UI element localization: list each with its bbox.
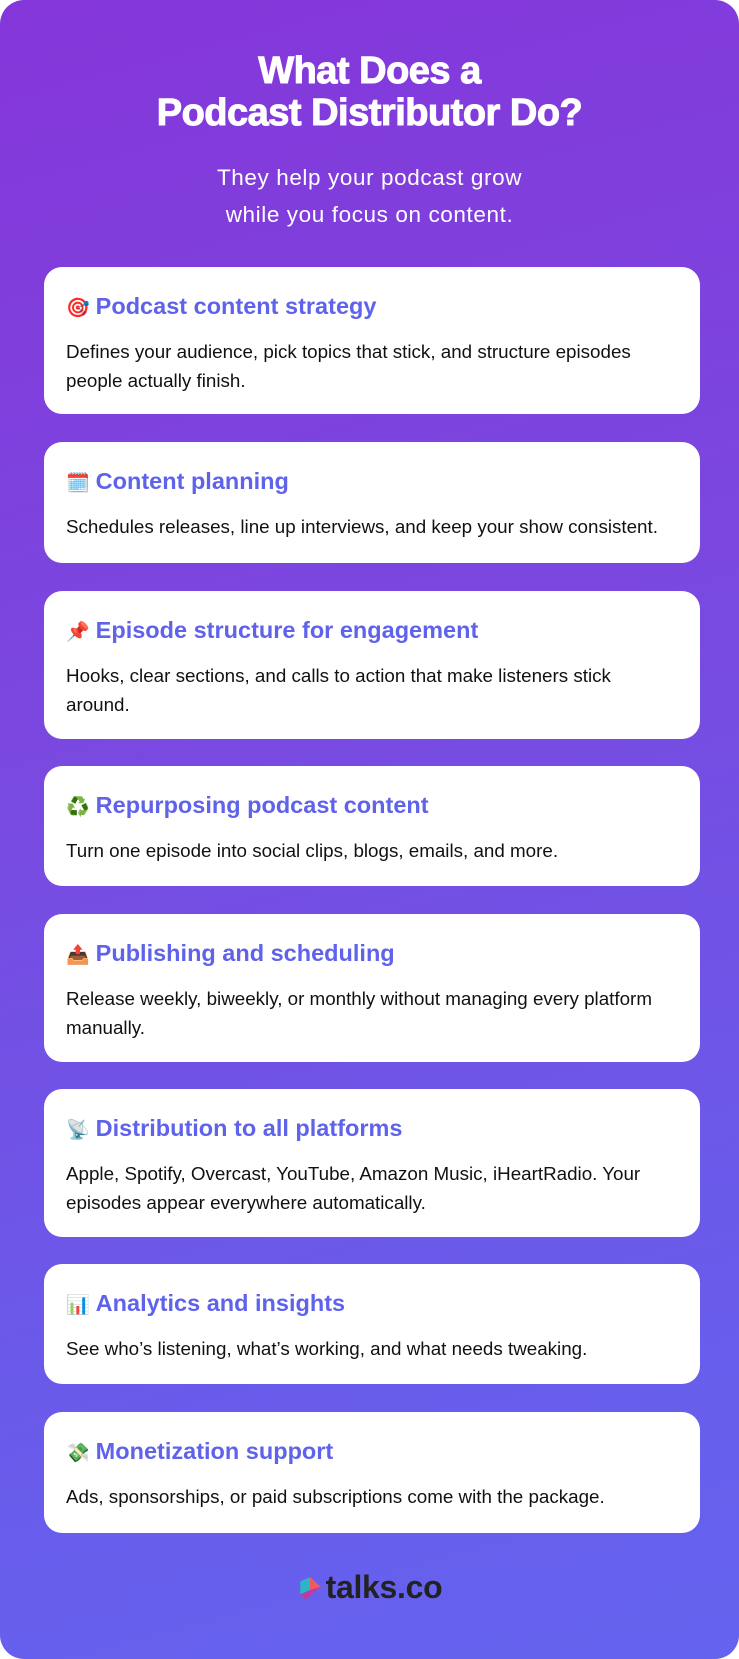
card: content planning: 🗓️ Content planning [66,468,289,494]
card: episode structure [44,591,700,739]
card: content planning: Schedules releases, line up interviews, and keep your show consistent. [66,516,658,537]
card: repurposing: Turn one episode into social clips, blogs, emails, and more. [66,840,558,861]
card: distribution [44,1089,700,1237]
card: content strategy [44,267,700,414]
card: monetization: Ads, sponsorships, or paid subscriptions come with the package. [66,1486,605,1507]
title [157,50,582,134]
card: repurposing [44,766,700,886]
card: monetization: 💸 Monetization support [66,1438,333,1464]
card: monetization [44,1412,700,1533]
card: content strategy: 🎯 Podcast content strategy [66,293,376,319]
logo: talks.co [326,1569,442,1605]
card: repurposing: ♻️ Repurposing podcast content [66,792,429,818]
card: analytics [44,1264,700,1384]
card: content planning [44,442,700,563]
title: Podcast Distributor Do? [157,92,582,134]
card: distribution: 📡 Distribution to all platforms [66,1115,402,1141]
subtitle: while you focus on content. [226,202,513,227]
card: analytics: See who’s listening, what’s working, and what needs tweaking. [66,1338,587,1359]
card: publishing [44,914,700,1062]
card: publishing: Release weekly, biweekly, or monthly without managing every platform manually. [66,988,652,1038]
subtitle: They help your podcast grow [217,165,522,190]
card: episode structure: Hooks, clear sections, and calls to action that make listeners stick around. [66,665,611,715]
card: distribution: Apple, Spotify, Overcast, YouTube, Amazon Music, iHeartRadio. Your episodes appear everywhere automatically. [66,1163,640,1213]
title: What Does a [258,50,481,92]
card: analytics: 📊 Analytics and insights [66,1290,345,1316]
card: episode structure: 📌 Episode structure for engagement [66,617,478,643]
subtitle [217,165,522,227]
card: publishing: 📤 Publishing and scheduling [66,940,395,966]
card: content strategy: Defines your audience, pick topics that stick, and structure episodes people actually finish. [66,341,631,391]
